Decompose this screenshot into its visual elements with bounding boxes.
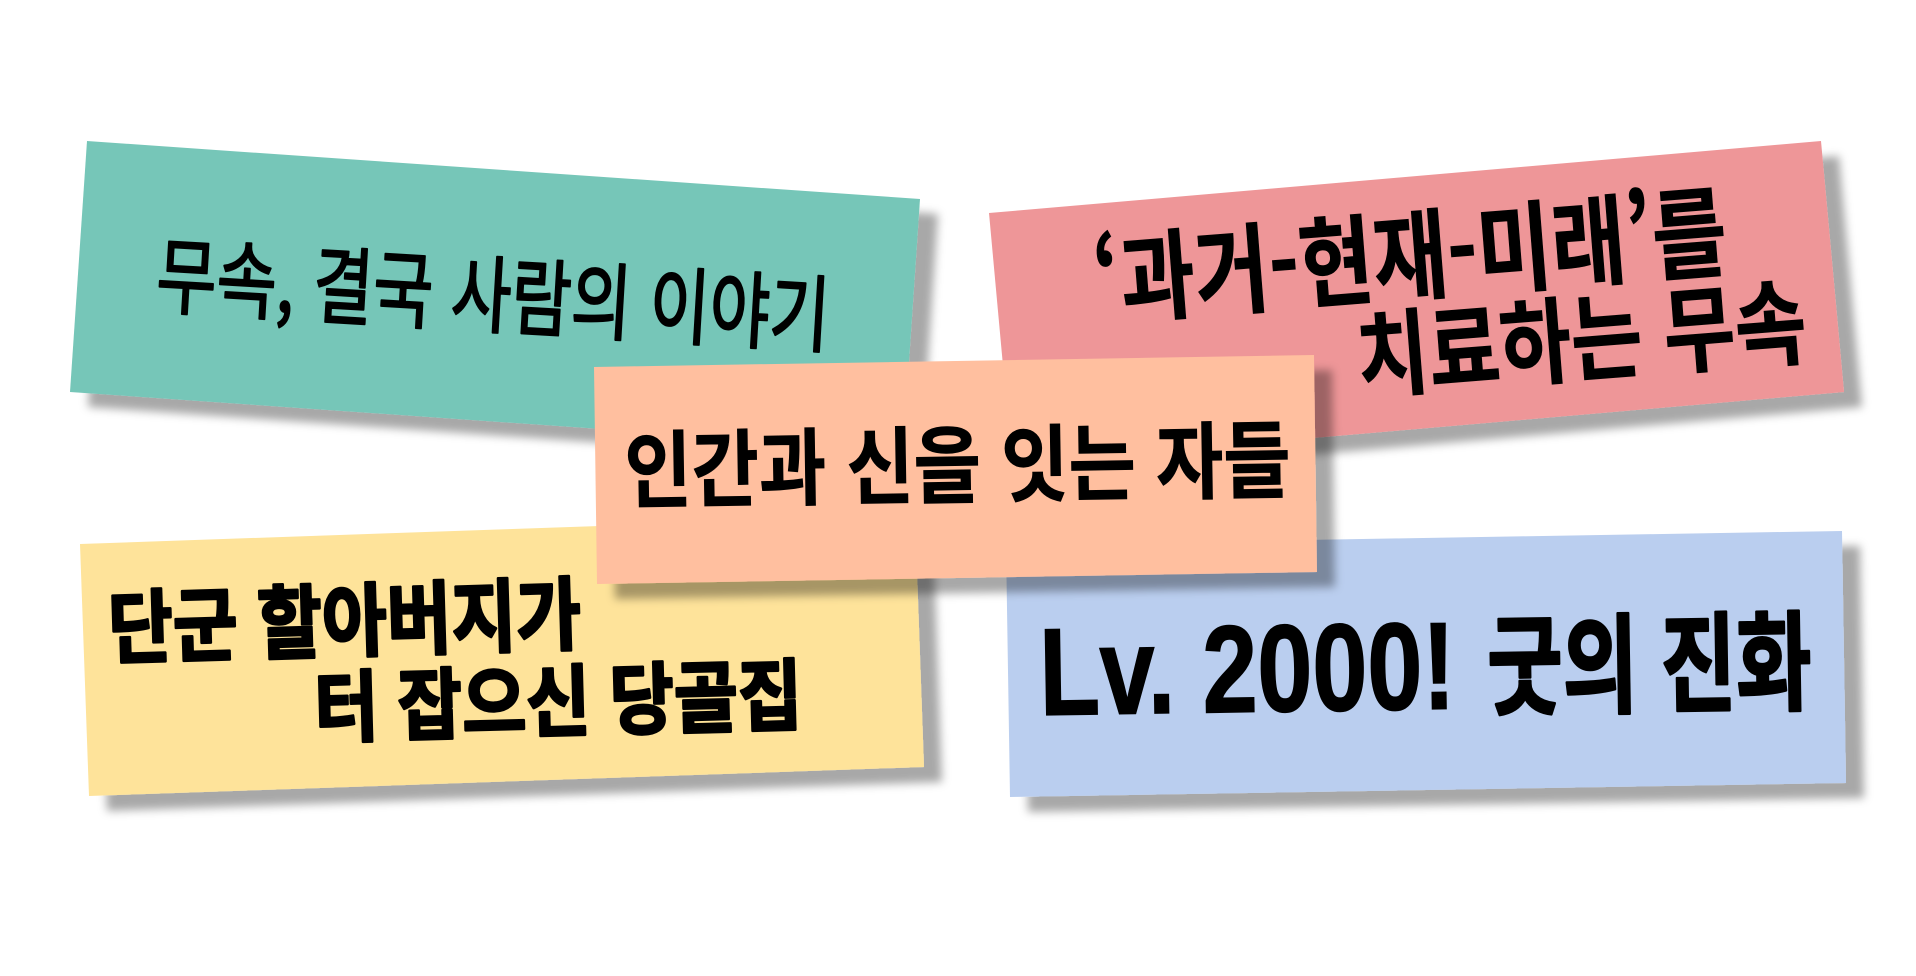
blue note background bbox=[1006, 531, 1846, 797]
orange note text: 인간과 신을 잇는 자들 bbox=[623, 395, 1291, 526]
blue note evolution text: 굿의 진화 bbox=[1486, 577, 1812, 738]
yellow note text line two: 터 잡으신 당골집 bbox=[313, 634, 803, 759]
panel: teal note bbox=[70, 141, 920, 450]
yellow note background bbox=[80, 515, 924, 796]
pink note background bbox=[989, 141, 1844, 464]
teal note background bbox=[70, 141, 920, 450]
panel: blue note bbox=[1006, 531, 1846, 797]
pink note text line one: ‘과거-현재-미래’를 bbox=[1088, 155, 1731, 346]
panel: pink note bbox=[989, 141, 1844, 464]
teal note text: 무속, 결국 사람의 이야기 bbox=[154, 210, 834, 371]
yellow note text line one: 단군 할아버지가 bbox=[106, 551, 583, 681]
panel: orange centre note bbox=[594, 355, 1317, 584]
panel: yellow note bbox=[80, 515, 924, 796]
orange note background bbox=[594, 355, 1317, 584]
pink note text line two: 치료하는 무속 bbox=[1352, 248, 1811, 419]
blue note level text: Lv. 2000! bbox=[1038, 597, 1456, 742]
